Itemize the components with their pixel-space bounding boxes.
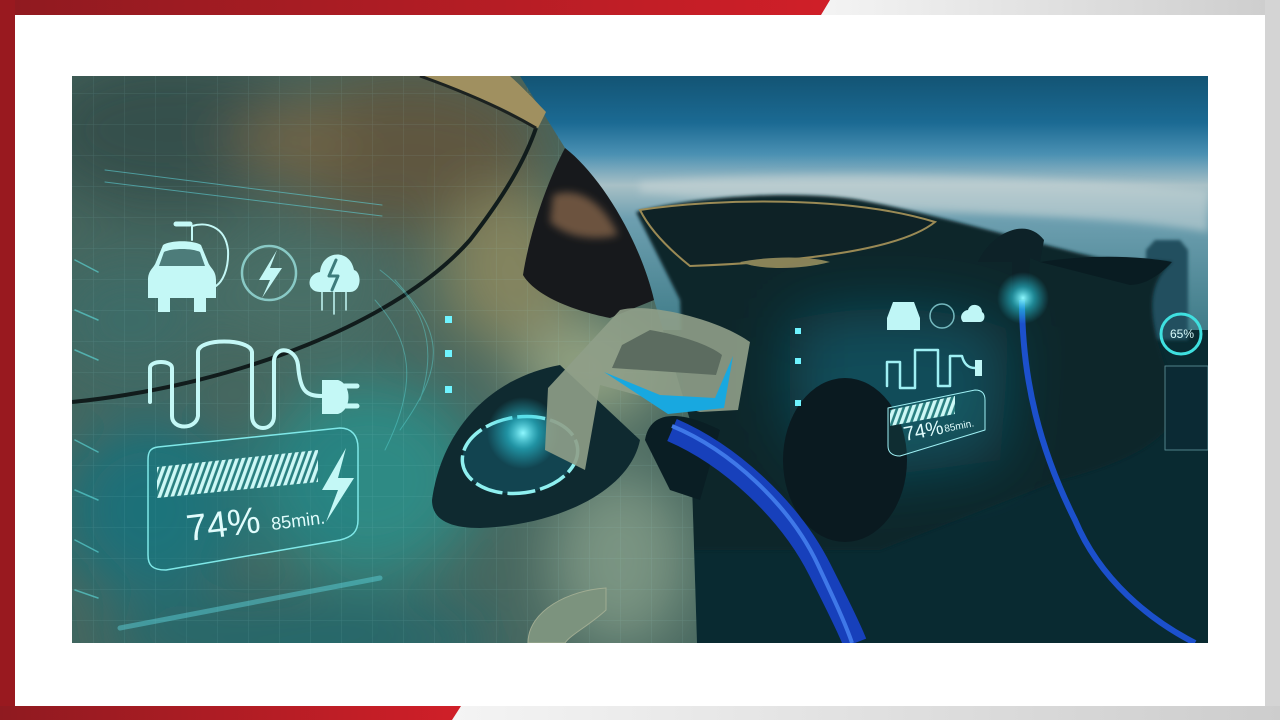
hud icon: wire and plug bbox=[150, 342, 357, 428]
frame: grey right band bbox=[1265, 0, 1280, 720]
charger handle bbox=[545, 308, 750, 470]
hud small icon: car bbox=[887, 302, 920, 330]
frame: grey bottom band bbox=[450, 706, 1280, 720]
rear car window bbox=[640, 201, 935, 266]
rear tire bbox=[783, 378, 907, 542]
hud: top lines bbox=[105, 170, 382, 216]
front car roof dark strip bbox=[420, 76, 536, 128]
front car paint bbox=[72, 76, 697, 643]
front wheel arch bbox=[528, 588, 606, 643]
charging port glow bbox=[489, 398, 550, 467]
charger blue light bbox=[604, 356, 733, 414]
hud icon: cloud bbox=[310, 254, 360, 314]
hud small wire bbox=[887, 350, 975, 388]
hud small battery panel bbox=[888, 390, 985, 456]
paint base bbox=[72, 76, 712, 643]
hud small icon: cloud bbox=[961, 305, 984, 322]
rear car teal reflection bbox=[790, 309, 1010, 480]
tail light reflection bbox=[550, 192, 618, 238]
hud small icon: bolt circle bbox=[930, 304, 954, 328]
front car door seam bbox=[72, 128, 536, 402]
rear car body bbox=[634, 192, 1172, 343]
frame: red top band bbox=[0, 0, 830, 15]
gauge percent: 65% bbox=[1170, 327, 1194, 341]
photo: electric cars charging bbox=[72, 76, 1208, 643]
front car tail light bbox=[523, 148, 654, 318]
hud: left dashes bbox=[75, 260, 98, 598]
charging port bbox=[432, 365, 640, 528]
battery minutes: 85min. bbox=[270, 508, 326, 534]
front car roof line bbox=[420, 76, 546, 128]
rear cable bbox=[1022, 300, 1195, 643]
hud icon: car with plug bbox=[148, 224, 228, 312]
front charging cable bbox=[672, 430, 855, 643]
charging port ring bbox=[460, 414, 580, 496]
paint tonal blobs bbox=[72, 76, 696, 643]
rear car spoiler bbox=[1040, 257, 1172, 285]
grid overlay bbox=[72, 76, 697, 643]
connector shadow bbox=[645, 416, 714, 498]
city building bbox=[1146, 240, 1188, 340]
charger handle opening bbox=[612, 330, 722, 375]
hud: battery panel bbox=[148, 428, 358, 570]
hud small plug bbox=[975, 360, 982, 376]
frame: red bottom band bbox=[0, 706, 461, 720]
small battery minutes: 85min. bbox=[943, 418, 975, 435]
gauge bbox=[1161, 314, 1201, 354]
rear charger glow bbox=[997, 272, 1049, 324]
glowing dots bbox=[445, 316, 801, 406]
hud: bottom strip bbox=[120, 578, 380, 628]
ground bbox=[640, 330, 1208, 643]
front cable highlight bbox=[672, 426, 852, 643]
hud: side circuit lines bbox=[375, 270, 433, 450]
sky bbox=[500, 76, 1208, 336]
rear charger bbox=[1000, 228, 1044, 247]
hud small battery bar bbox=[890, 396, 955, 426]
clouds bbox=[640, 175, 1208, 232]
side screen bbox=[1165, 366, 1208, 450]
right hud bbox=[887, 302, 1208, 456]
frame: red left band bbox=[0, 0, 15, 720]
frame: grey top band bbox=[820, 0, 1280, 15]
battery percent: 74% bbox=[184, 499, 262, 549]
hud icon: bolt in circle bbox=[242, 246, 296, 300]
left hud bbox=[75, 170, 433, 628]
rear car window reflection bbox=[740, 258, 830, 268]
small battery percent: 74% bbox=[902, 417, 945, 446]
